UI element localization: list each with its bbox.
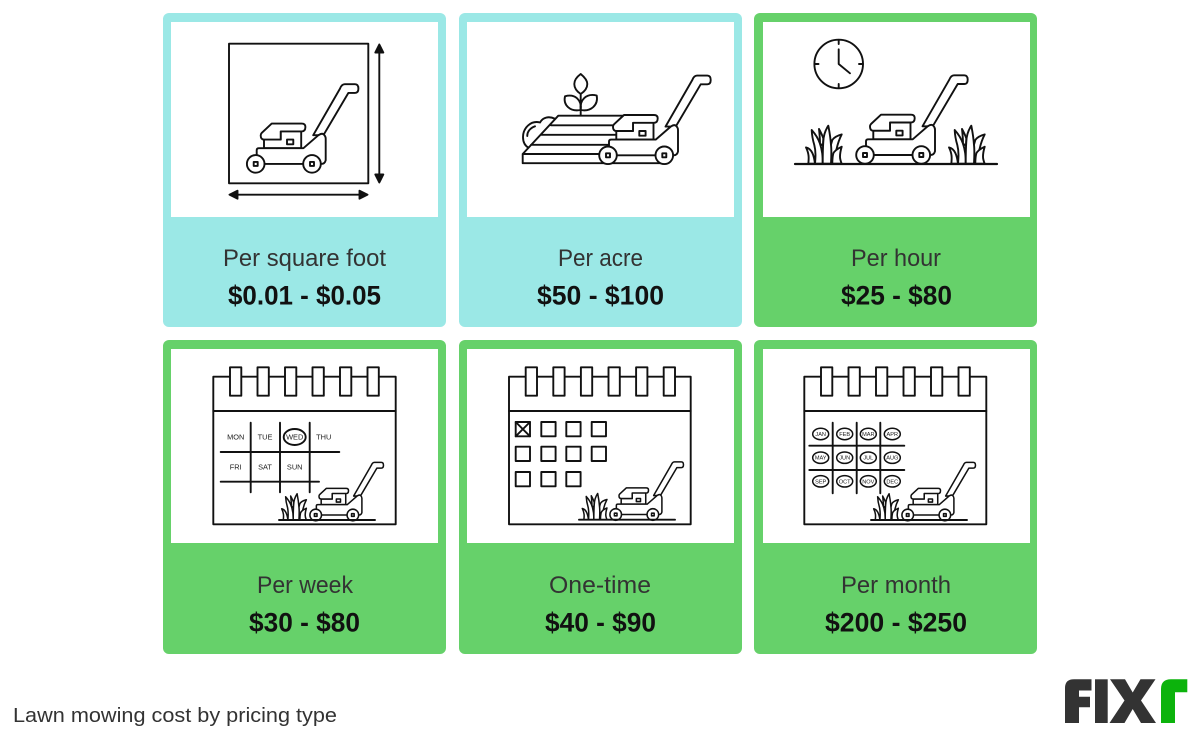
card: per square foot [163,13,446,327]
label: Per hour [851,245,941,272]
icon: monthly calendar with mower: JAN [815,432,826,438]
price: $40 - $90 [545,608,656,638]
icon: monthly calendar with mower [804,367,986,524]
icon: monthly calendar with mower: DEC [886,479,898,485]
icon: monthly calendar with mower: OCT [839,479,851,485]
label: Per week [257,572,354,599]
icon: weekly calendar with mower: TUE [258,433,272,442]
price: $200 - $250 [825,608,967,638]
label: Per acre [558,245,643,272]
label: One-time [549,572,651,599]
icon: monthly calendar with mower: AUG [886,456,898,462]
icon: monthly calendar with mower: APR [887,432,898,438]
icon: calendar with checked box and mower [509,367,691,524]
icon: clock with mower on grass [795,40,997,164]
icon: monthly calendar with mower: SEP [815,479,827,485]
card: per acre [459,13,742,327]
card: per hour [754,13,1037,327]
logo: Fixr [1065,679,1187,723]
card: per month [754,340,1037,654]
icon: monthly calendar with mower: MAR [862,432,875,438]
price: $50 - $100 [537,280,664,310]
icon: weekly calendar with mower: MON [227,433,244,442]
icon: monthly calendar with mower: JUN [839,456,850,462]
icon: weekly calendar with mower: SAT [258,462,272,471]
icon: monthly calendar with mower: FEB [839,432,850,438]
icon: weekly calendar with mower: FRI [230,462,242,471]
icon: weekly calendar with mower: SUN [287,462,303,471]
icon: monthly calendar with mower: NOV [862,479,875,485]
icon: mower on acre field with plant [523,74,711,164]
icon: monthly calendar with mower: JUL [863,456,873,462]
caption: Lawn mowing cost by pricing type [13,705,337,727]
icon: weekly calendar with mower: WED [286,433,303,442]
icon: mower in measured square [229,44,383,199]
icon: monthly calendar with mower: MAY [815,456,827,462]
label: Per month [841,572,951,599]
price: $0.01 - $0.05 [228,280,381,310]
card: per week [163,340,446,654]
price: $30 - $80 [249,608,360,638]
price: $25 - $80 [841,280,952,310]
icon: weekly calendar with mower: THU [316,433,331,442]
label: Per square foot [223,245,386,272]
card: one-time [459,340,742,654]
icon: weekly calendar with mower [213,367,396,524]
